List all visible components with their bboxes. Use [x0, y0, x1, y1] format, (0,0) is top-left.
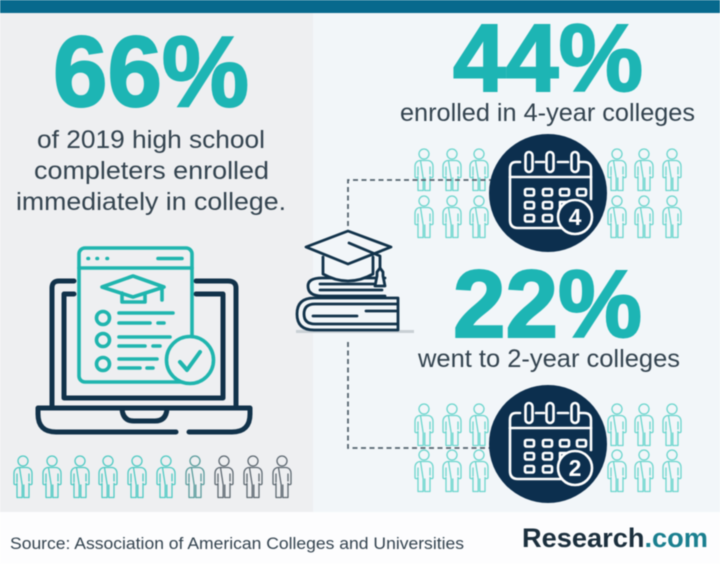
text block: 66% description: completers enrolled: [34, 157, 269, 185]
cap: [323, 257, 373, 281]
text block: 66% description: [16, 126, 286, 216]
pictogram: people, 2-year group: [415, 404, 681, 492]
lower book: [297, 298, 398, 330]
heading: 22%: 22%: [453, 251, 642, 358]
laptop: [38, 281, 250, 432]
icon: graduation cap on books: [296, 231, 414, 333]
right panel background: [313, 13, 720, 512]
icon: calendar 4: 4: [569, 204, 582, 230]
icon: laptop with application form: [38, 248, 250, 432]
book shadow: [296, 330, 414, 333]
left panel background: [0, 13, 313, 512]
upper book: [308, 278, 385, 296]
top bar: [0, 0, 720, 13]
pictogram: people, 4-year group: [415, 149, 681, 238]
text block: 66% description: immediately in college.: [16, 188, 286, 216]
label: enrolled in 4-year colleges: enrolled in 4-year colleges: [400, 99, 695, 127]
application form: [79, 248, 214, 384]
arrow: dashed connector to 2-year: [348, 342, 492, 448]
icon: calendar 2: 2: [569, 455, 581, 481]
pictogram: 10 people, 6 to 7 highlighted: [14, 456, 291, 498]
logo: Research.com: Research.com: [522, 523, 708, 553]
icon: calendar 4: [489, 134, 607, 252]
source note: Source: Association of American Colleges and Universities: [10, 535, 464, 553]
heading: 44%: 44%: [453, 5, 643, 112]
text block: 66% description: of 2019 high school: [37, 126, 265, 154]
label: went to 2-year colleges: went to 2-year colleges: [417, 345, 680, 373]
heading: 66%: 66%: [53, 16, 249, 128]
icon: calendar 2: [489, 385, 607, 503]
arrow: dashed connector to 4-year: [348, 180, 492, 226]
